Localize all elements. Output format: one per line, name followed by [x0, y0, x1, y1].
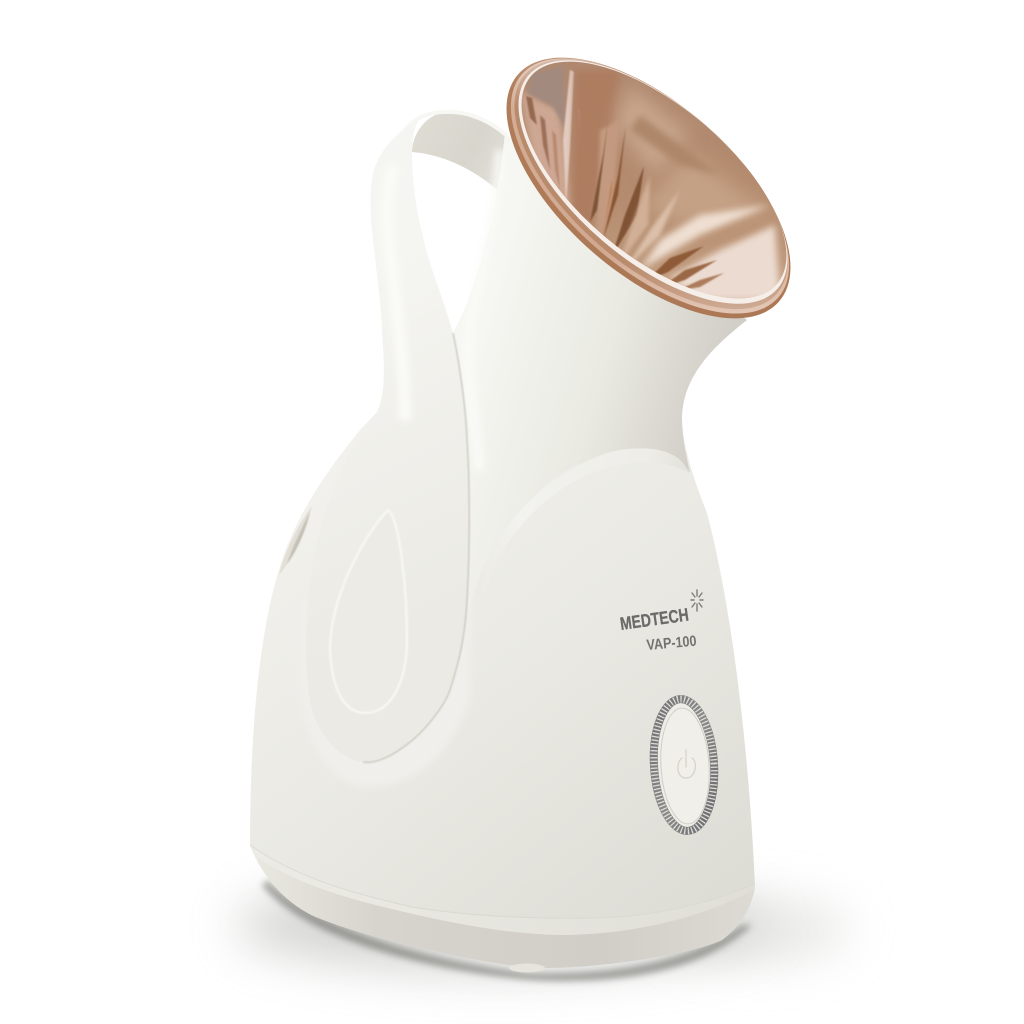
funnel interior — [482, 19, 826, 341]
button face — [658, 707, 712, 825]
power icon — [678, 750, 695, 778]
outer halo around strap — [297, 600, 472, 787]
funnel outer rim — [462, 10, 835, 366]
lower base — [284, 873, 716, 968]
sunburst mark — [691, 590, 703, 611]
upper step — [290, 900, 334, 924]
product illustration: facial steamer — [229, 58, 842, 992]
rim white line — [478, 17, 828, 347]
ring knurling — [650, 697, 718, 833]
model number: VAP-100 — [646, 633, 697, 654]
rubber foot — [509, 964, 545, 972]
neck shading — [453, 133, 747, 610]
base plinth — [250, 845, 755, 980]
strap right edge seam — [363, 333, 469, 762]
strap top sheen — [387, 165, 405, 420]
metal ring — [650, 697, 718, 833]
carrying handle underside — [405, 112, 507, 192]
neck left highlight — [468, 150, 500, 470]
interior reflections — [520, 66, 780, 300]
main body and neck — [250, 133, 755, 968]
shoulder contour band — [480, 448, 690, 610]
rim copper ring — [472, 14, 830, 354]
teardrop edge — [330, 510, 407, 713]
floor shadow — [235, 879, 850, 981]
brand logo — [619, 590, 703, 634]
strap front — [306, 118, 469, 762]
brand name: MEDTECH — [619, 605, 690, 634]
recessed teardrop — [330, 510, 407, 713]
teardrop panel and strap — [297, 118, 472, 787]
side grip recess — [279, 506, 312, 575]
power button — [650, 697, 718, 833]
funnel — [506, 58, 790, 318]
rim light ring — [468, 13, 832, 359]
